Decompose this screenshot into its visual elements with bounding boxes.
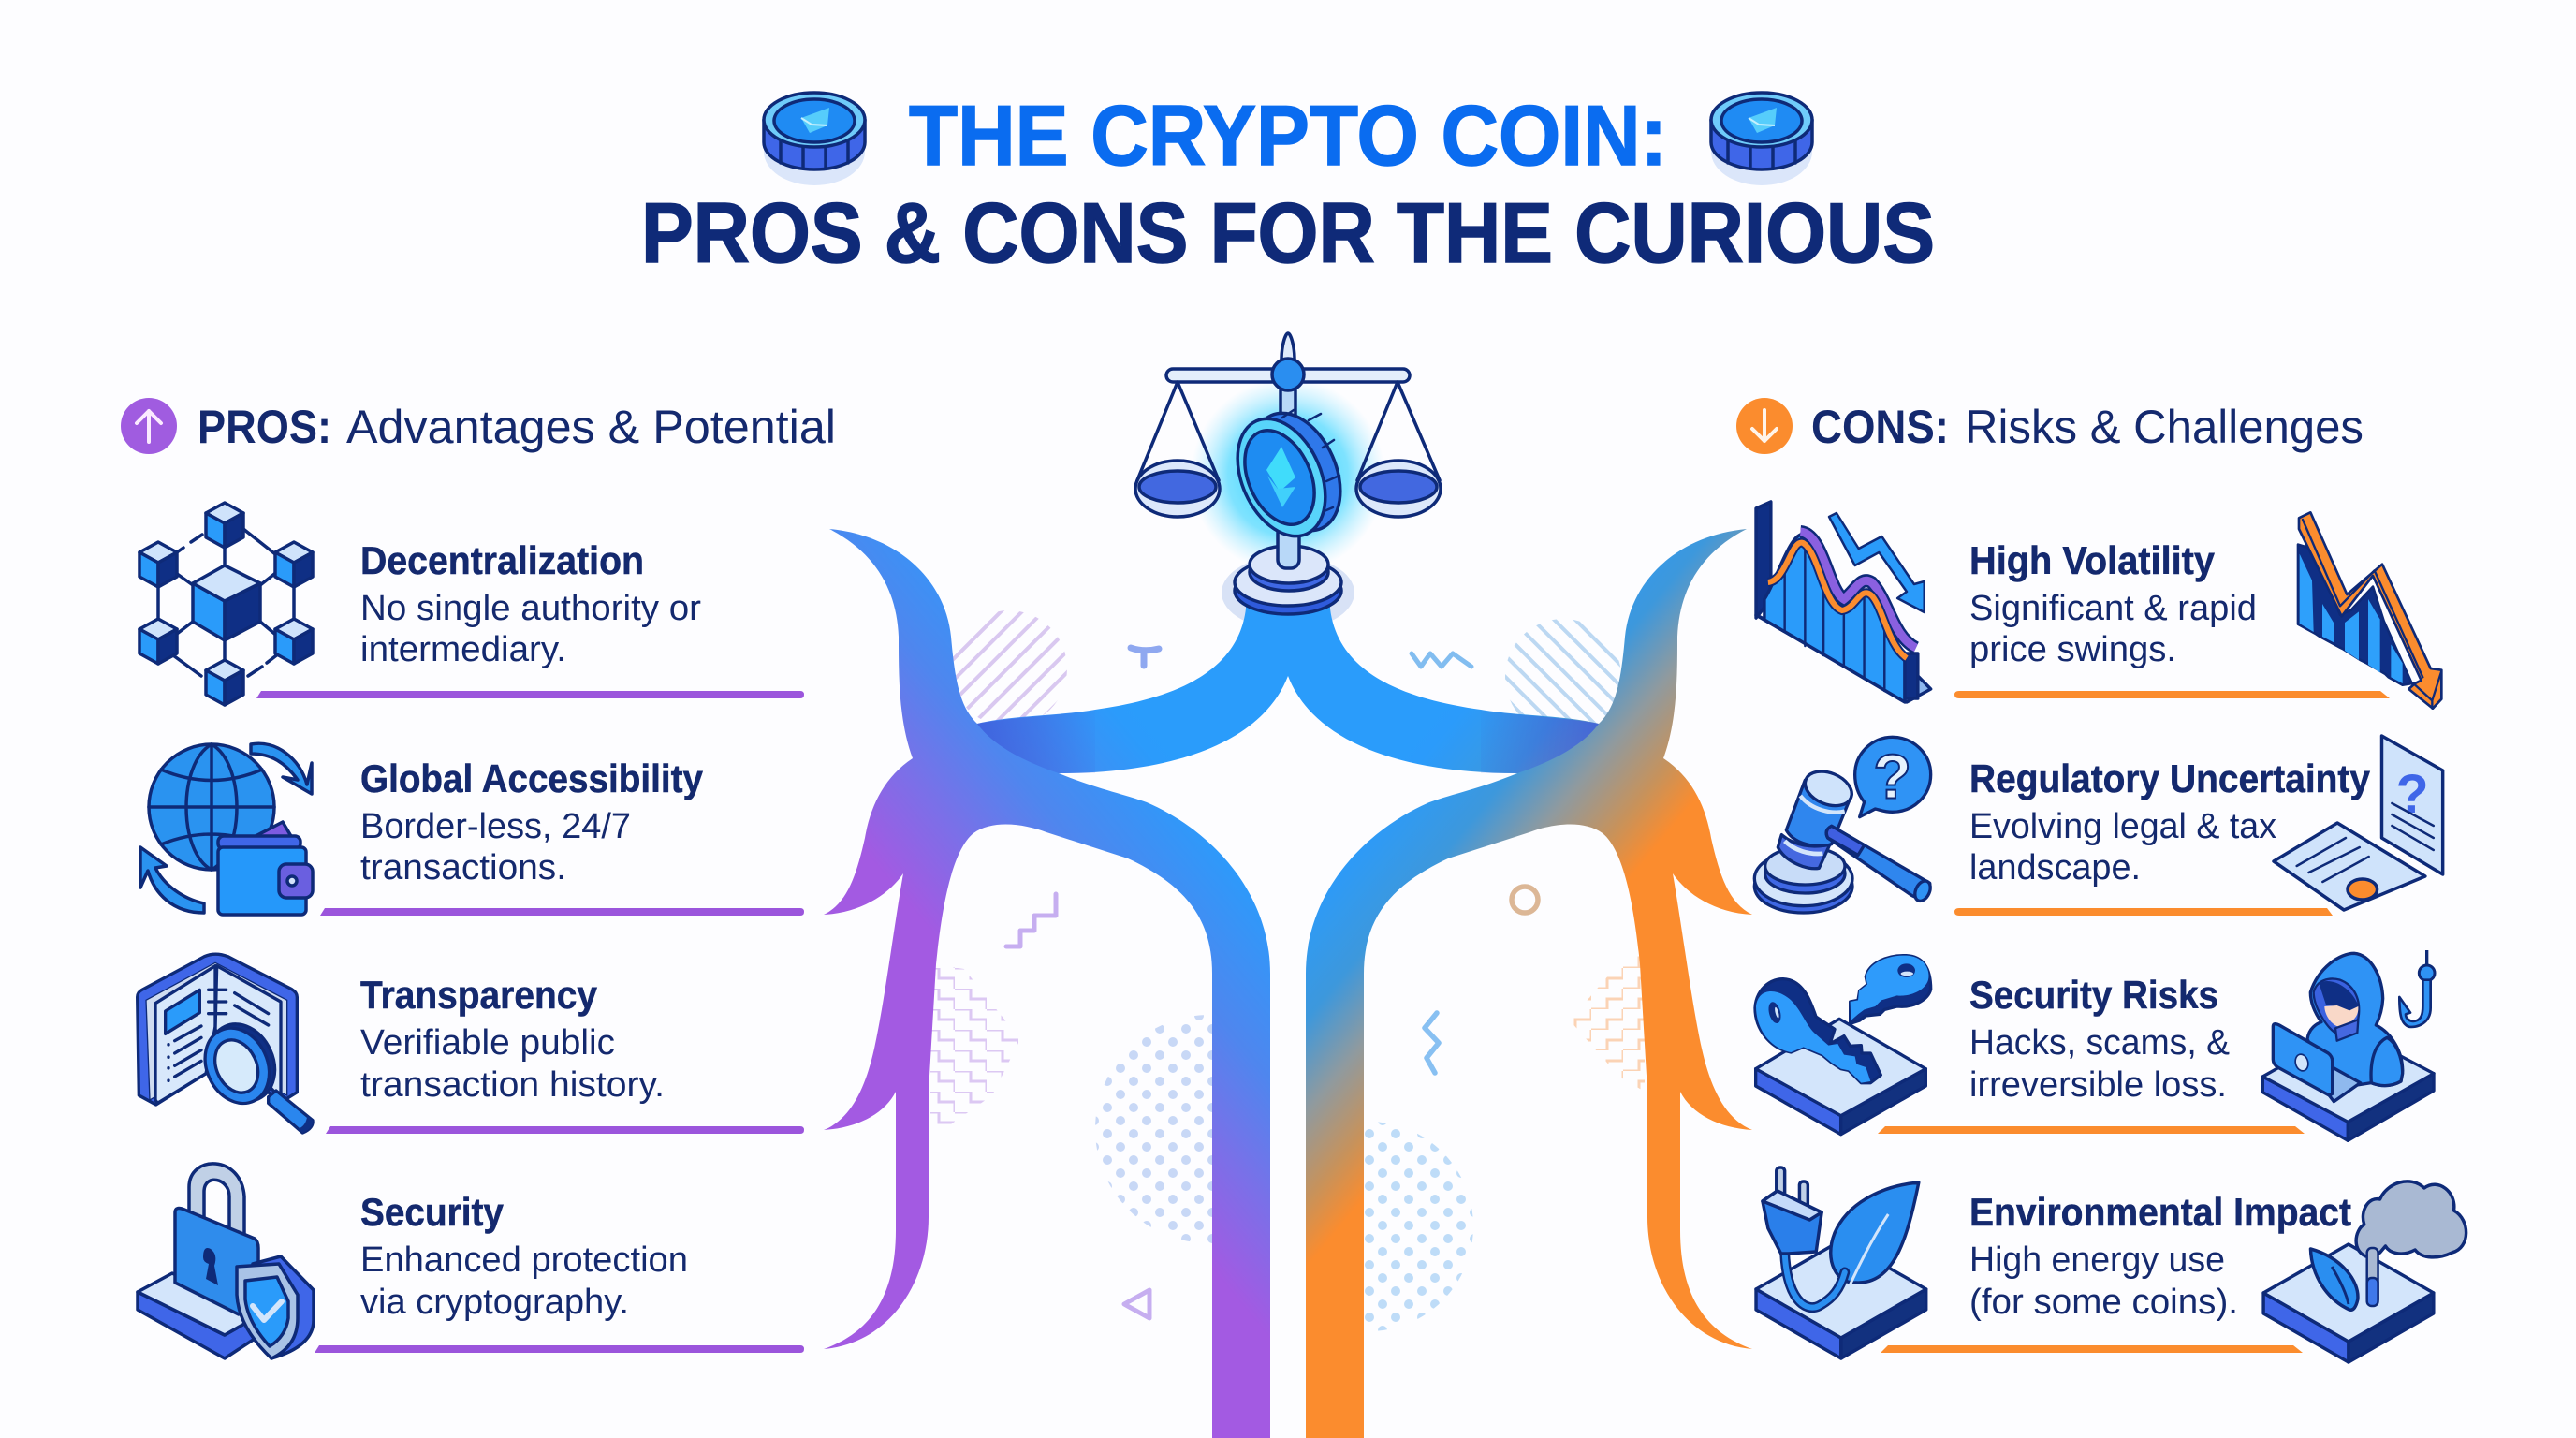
title: Transparency [360,973,598,1017]
icon: gavel and question bubble [1754,737,1933,913]
item: security risks [1755,950,2435,1140]
cons label: CONS: [1811,401,1949,453]
icon: plug and leaf on platform [1756,1167,1926,1358]
icon: right coin [1711,93,1812,185]
underline bar [1954,908,2333,916]
item: decentralization: intermediary. [360,630,566,669]
underline bar [256,691,804,698]
cons heading [1736,398,2364,454]
title: Regulatory Uncertainty [1969,756,2371,800]
item: security: via cryptography. [360,1283,629,1322]
title: Security Risks [1969,973,2218,1017]
description: Border-less, 24/7 [360,807,631,846]
icon: broken key on platform [1755,956,1931,1135]
item: decentralization [139,503,804,705]
item: global accessibility [140,743,804,916]
icon: globe and wallet [140,743,313,915]
panel: pros column [121,398,836,1358]
description: High energy use [1969,1240,2225,1280]
description: Enhanced protection [360,1240,688,1280]
icon: padlock and shield [138,1164,314,1358]
icon: ledger and magnifier [138,954,313,1133]
icon: left coin [764,93,865,185]
underline bar [1881,1345,2303,1353]
item: regulatory uncertainty: landscape. [1969,848,2141,888]
item: high volatility: price swings. [1969,630,2176,669]
item: security risks: irreversible loss. [1969,1065,2227,1105]
item: global accessibility: transactions. [360,848,566,888]
icon: falling bars with arrow [2298,512,2441,709]
icon: documents with question mark [2274,736,2443,910]
icon: down arrow badge [1736,398,1793,454]
item: environmental impact: (for some coins). [1969,1283,2238,1322]
item: transparency [138,954,804,1134]
icon: cube network [139,503,313,705]
underline bar [1878,1126,2305,1134]
icon: smoke and leaf on platform [2263,1181,2466,1362]
icon: documents with question mark: ? [2396,765,2429,825]
underline bar [320,908,804,916]
pros subtitle: Advantages & Potential [346,401,836,453]
description: Verifiable public [360,1023,615,1063]
pros label: PROS: [198,401,331,453]
icon: falling area chart [1756,502,1931,702]
description: Significant & rapid [1969,589,2257,628]
underline bar [1954,691,2390,698]
title: Global Accessibility [360,756,704,800]
decorative background patterns [930,555,1645,1331]
title: Security [360,1190,505,1234]
title: Environmental Impact [1969,1190,2351,1234]
description: Evolving legal & tax [1969,807,2276,846]
item: environmental impact [1756,1167,2466,1362]
panel: cons column [1736,398,2466,1362]
title [641,89,1935,281]
item: security [138,1164,804,1358]
icon: balance scale with coin [1135,333,1441,614]
cons flow branches [1288,529,1752,1438]
title: Decentralization [360,538,644,582]
description: Hacks, scams, & [1969,1023,2230,1063]
title: High Volatility [1969,538,2216,582]
description: No single authority or [360,589,701,628]
cons subtitle: Risks & Challenges [1965,401,2364,453]
icon: hooded hacker with hook [2262,950,2435,1140]
item: transparency: transaction history. [360,1065,665,1105]
title line 2: PROS & CONS FOR THE CURIOUS [641,186,1935,281]
underline bar [326,1126,804,1134]
pros flow branches [824,529,1288,1438]
item: high volatility [1756,502,2441,709]
item: regulatory uncertainty [1754,736,2443,916]
icon: gavel and question bubble: ? [1873,743,1911,813]
pros heading [121,398,836,454]
icon: up arrow badge [121,398,177,454]
underline bar [315,1345,804,1353]
title line 1: THE CRYPTO COIN: [909,89,1667,183]
